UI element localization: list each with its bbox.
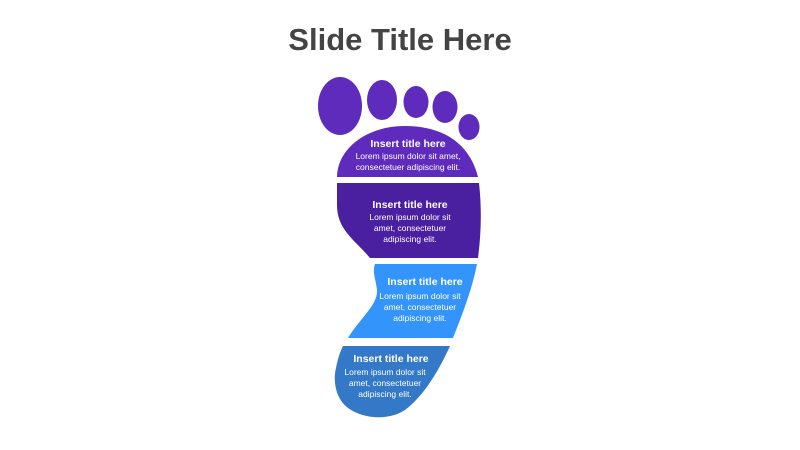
segment 4: adipiscing elit.	[358, 389, 412, 399]
segment 1	[337, 126, 478, 177]
segment 4: Lorem ipsum dolor sit	[344, 367, 426, 377]
segment 4: Insert title here	[353, 353, 429, 365]
segment 1: Insert title here	[370, 138, 446, 150]
segment 2: Insert title here	[372, 199, 448, 211]
segment 2: Lorem ipsum dolor sit	[369, 212, 451, 222]
title: Slide Title Here	[288, 22, 512, 57]
segment 4: amet, consectetuer	[349, 378, 421, 388]
segment 1: Lorem ipsum dolor sit amet,	[356, 151, 460, 161]
segment 3: adipiscing elit.	[393, 313, 447, 323]
segment 3: Lorem ipsum dolor sit	[379, 291, 461, 301]
segment 2: adipiscing elit.	[383, 234, 437, 244]
segment 1: consectetuer adipiscing elit.	[356, 162, 460, 172]
segment 3: amet, consectetuer	[384, 302, 456, 312]
segment 2	[337, 183, 481, 258]
toes	[318, 77, 480, 140]
segment 3	[348, 264, 477, 338]
segment 2: amet, consectetuer	[374, 223, 446, 233]
segment 3: Insert title here	[387, 276, 463, 288]
segment 4	[335, 346, 450, 417]
